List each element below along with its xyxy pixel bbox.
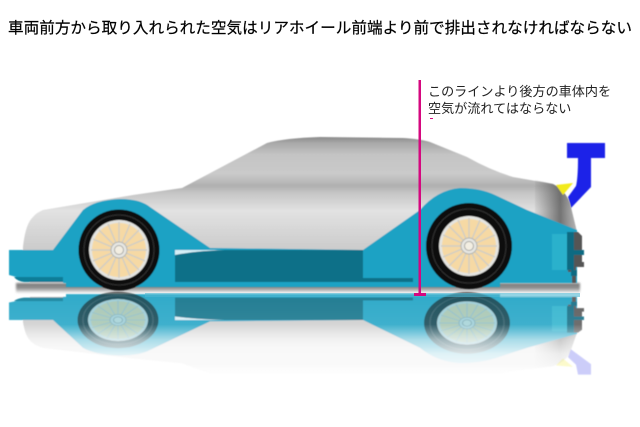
icon: yellow marker [556,183,573,195]
title: 車両前方から取り入れられた空気はリアホイール前端より前で排出されなければならない [8,19,632,37]
icon: rear wing [567,143,605,208]
reflection floor strip [145,293,580,297]
callout [428,84,611,116]
car side view [9,137,584,290]
ground shadow [16,283,580,293]
front wheel reflection [78,292,158,348]
callout: このラインより後方の車体内を [428,84,611,99]
front wheel [78,210,160,290]
rear wheel reflection [424,292,510,354]
rear wheel [426,203,512,289]
mirrored car reflection [8,291,585,366]
callout: 空気が流れてはならない [428,101,571,116]
regulation line [414,80,433,296]
wing and marker reflection [556,349,591,375]
